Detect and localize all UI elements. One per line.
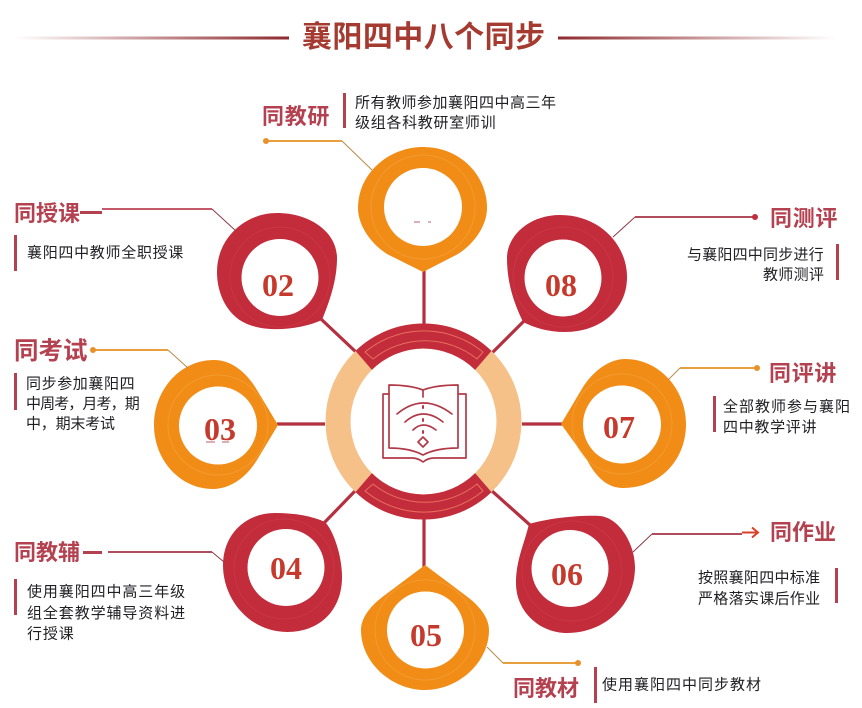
- callout: 同作业: 按照襄阳四中标准: [698, 570, 820, 586]
- central ring: [338, 323, 509, 520]
- callout: 同评讲: 全部教师参与襄阳: [723, 398, 851, 416]
- callout: 同作业: [633, 520, 838, 608]
- number 08: 08: [545, 267, 577, 303]
- callout: 同测评: 与襄阳四中同步进行: [687, 246, 824, 264]
- node 05: orange bottom: [361, 565, 489, 690]
- callout: 同授课: 同授课: [14, 201, 80, 226]
- callout: 同教研: 级组各科教研室师训: [355, 114, 496, 132]
- callout: 同教辅: 使用襄阳四中高三年级: [27, 584, 186, 600]
- callout: 同授课: 襄阳四中教师全职授课: [27, 244, 184, 262]
- callout: 同教材: [487, 647, 762, 703]
- ring top segment: [356, 323, 492, 370]
- title: 襄阳四中八个同步: [302, 21, 545, 54]
- node 06: red lower right: [516, 516, 635, 633]
- callout: 同考试: [14, 337, 188, 432]
- callout: 同测评: 同测评: [770, 206, 838, 231]
- callout: 同教研: 所有教师参加襄阳四中高三年: [355, 94, 557, 112]
- callout: 同教辅: 组全套教学辅导资料进: [27, 604, 186, 622]
- number 06: 06: [551, 556, 583, 592]
- node 03: orange left: [154, 360, 278, 489]
- callout: 同测评: 教师测评: [763, 266, 824, 284]
- number 02: 02: [262, 267, 294, 303]
- callout: 同授课: [14, 201, 236, 271]
- number 03: 03: [204, 411, 236, 447]
- callout: 同评讲: 四中教学评讲: [723, 419, 817, 436]
- callout: 同作业: 严格落实课后作业: [698, 590, 820, 608]
- number 05: 05: [410, 617, 442, 653]
- callout: 同考试: 中周考，月考，期: [26, 396, 139, 412]
- ring bottom segment: [356, 473, 492, 520]
- connector lines: [277, 270, 562, 567]
- icon: open book with wifi signal: [383, 385, 466, 462]
- node 04: red lower left: [223, 513, 342, 632]
- callout: 同教研: [262, 93, 557, 170]
- callout: 同考试: 中，期末考试: [26, 416, 115, 432]
- callout: 同测评: [613, 206, 839, 284]
- callout: 同教研: 同教研: [262, 104, 330, 129]
- callout: 同教辅: 行授课: [27, 626, 75, 642]
- callout: 同评讲: 同评讲: [769, 361, 837, 386]
- number 04: 04: [270, 550, 302, 586]
- callout: 同教材: 同教材: [513, 676, 579, 701]
- node 08: red upper right: [507, 215, 627, 332]
- callout: 同作业: 同作业: [770, 520, 836, 545]
- callout: 同教辅: [14, 540, 224, 642]
- callout: 同考试: 同考试: [14, 337, 88, 365]
- callout: 同教材: 使用襄阳四中同步教材: [602, 676, 762, 694]
- node 02: red upper left: [217, 213, 337, 329]
- node 07: orange right: [561, 359, 686, 488]
- callout: 同考试: 同步参加襄阳四: [26, 376, 135, 392]
- callout: 同评讲: [668, 361, 851, 436]
- title: [15, 21, 835, 54]
- number 07: 07: [603, 409, 635, 445]
- callout: 同教辅: 同教辅: [14, 540, 80, 565]
- node 01: orange top: [358, 147, 487, 272]
